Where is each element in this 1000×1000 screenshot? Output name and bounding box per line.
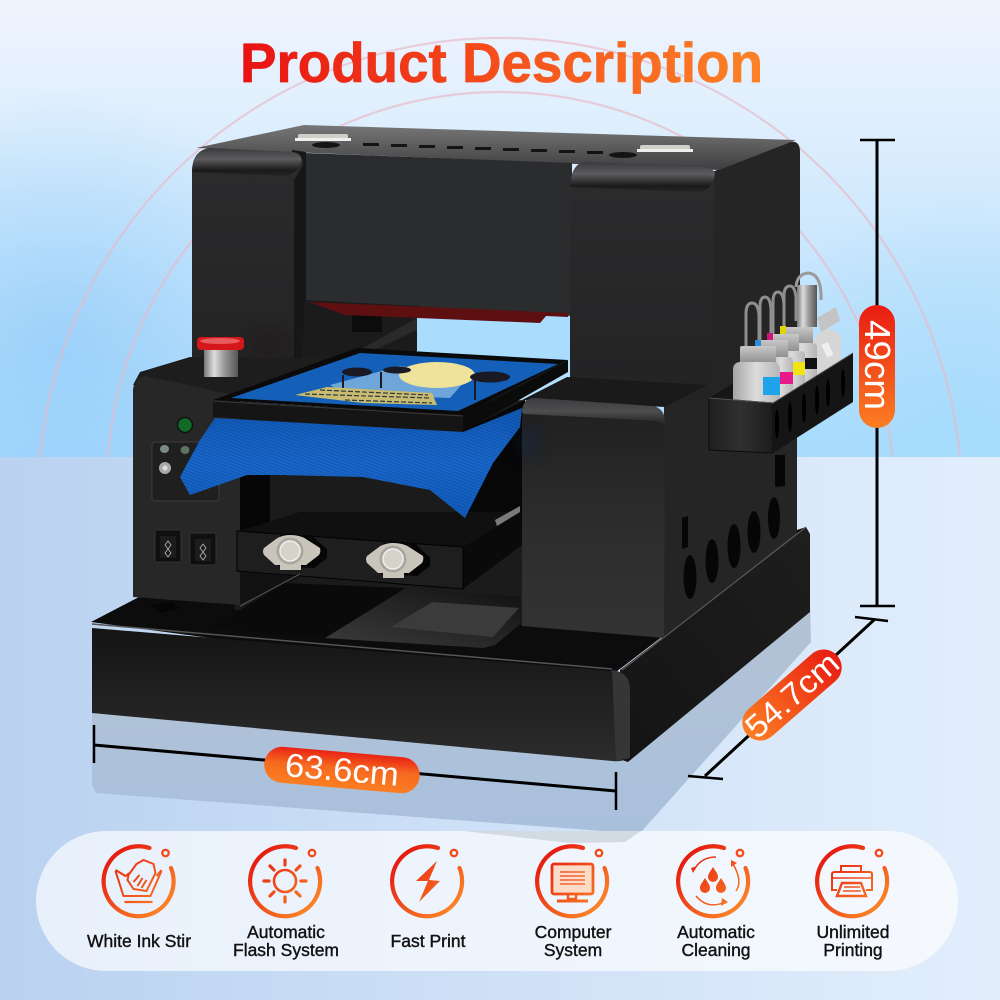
feature: automatic flash system: Automatic bbox=[247, 922, 325, 942]
feature: unlimited printing: Printing bbox=[823, 940, 883, 960]
sky band of design bbox=[330, 366, 470, 398]
right tower bbox=[570, 162, 715, 400]
lower rails and plate bbox=[150, 572, 521, 648]
lower left control box front bbox=[133, 376, 240, 605]
height dimension: 49cm bbox=[857, 320, 898, 410]
title: Product Description bbox=[240, 31, 763, 94]
feature bar panel bbox=[36, 831, 958, 971]
feature: computer system: System bbox=[544, 940, 602, 960]
feature: automatic flash system: Flash System bbox=[233, 940, 339, 960]
feature: automatic cleaning: Automatic bbox=[677, 922, 755, 942]
floor reflection of printer bbox=[92, 600, 811, 832]
feature: automatic flash system bbox=[233, 846, 339, 960]
lower drawer bbox=[237, 506, 522, 589]
icon: drops and arrows bbox=[678, 846, 748, 916]
metal clamp left bbox=[263, 535, 327, 570]
base right side bbox=[620, 527, 810, 762]
print platen with shirt design bbox=[213, 348, 568, 432]
ink bottle set bbox=[733, 273, 841, 407]
concentric background arcs bbox=[40, 38, 960, 457]
blue t-shirt drape bbox=[180, 408, 522, 518]
ink bottle bracket bbox=[709, 353, 853, 453]
icon: lightning bolt bbox=[392, 846, 462, 916]
green power button bbox=[178, 418, 192, 432]
base top surface bbox=[91, 527, 806, 672]
red carriage strip bbox=[309, 302, 568, 323]
feature: unlimited printing: Unlimited bbox=[817, 922, 889, 942]
depth dimension bbox=[688, 617, 888, 779]
soft shade on right column bbox=[521, 428, 539, 456]
feature: automatic cleaning: Cleaning bbox=[681, 940, 751, 960]
latch left bbox=[295, 134, 351, 141]
width dimension bbox=[94, 725, 616, 810]
top cover bbox=[196, 125, 796, 170]
side holes bbox=[682, 455, 785, 599]
feature: computer system: Computer bbox=[535, 922, 612, 942]
latch right bbox=[637, 145, 693, 152]
soft shadow behind emergency button bbox=[252, 333, 284, 357]
feature: unlimited printing bbox=[817, 846, 889, 960]
feature: white ink stir: White Ink Stir bbox=[87, 931, 191, 951]
feature: fast print: Fast Print bbox=[391, 931, 466, 951]
printer bbox=[91, 125, 853, 762]
cavity bbox=[235, 400, 525, 625]
height dimension bbox=[857, 140, 898, 606]
magenta ink bottle bbox=[755, 297, 793, 407]
black ink bottle bbox=[780, 286, 817, 393]
white ink jug bbox=[812, 307, 841, 385]
cyan ink bottle bbox=[733, 303, 780, 407]
top vents bbox=[312, 142, 637, 158]
base front face bbox=[92, 628, 628, 761]
opening dark interior bbox=[300, 300, 420, 390]
red emergency button bbox=[197, 337, 244, 377]
sun motif bbox=[399, 362, 475, 388]
shirt lettering block bbox=[295, 387, 437, 405]
icon: sun bbox=[250, 846, 320, 916]
icon: basin with hand bbox=[104, 846, 174, 916]
palm silhouettes bbox=[342, 366, 510, 400]
center head panel bbox=[305, 153, 572, 316]
feature: white ink stir bbox=[87, 846, 191, 951]
metal stir cylinder bbox=[796, 273, 821, 327]
left tower bbox=[192, 148, 303, 370]
yellow ink bottle bbox=[768, 292, 805, 401]
icon: monitor bbox=[537, 846, 607, 916]
feature: automatic cleaning bbox=[677, 846, 755, 960]
control panel bbox=[152, 442, 219, 501]
lower left control box top bbox=[133, 357, 345, 395]
base corner highlight bbox=[612, 670, 630, 761]
upper body side panel bbox=[664, 142, 800, 640]
feature: computer system bbox=[535, 846, 612, 960]
rocker switches bbox=[155, 530, 216, 565]
depth dimension: 54.7cm bbox=[738, 645, 846, 745]
feature: fast print bbox=[391, 846, 466, 951]
right column bbox=[522, 377, 707, 638]
metal clamp right bbox=[366, 543, 430, 578]
width dimension: 63.6cm bbox=[284, 746, 400, 793]
icon: printer bbox=[817, 846, 887, 916]
